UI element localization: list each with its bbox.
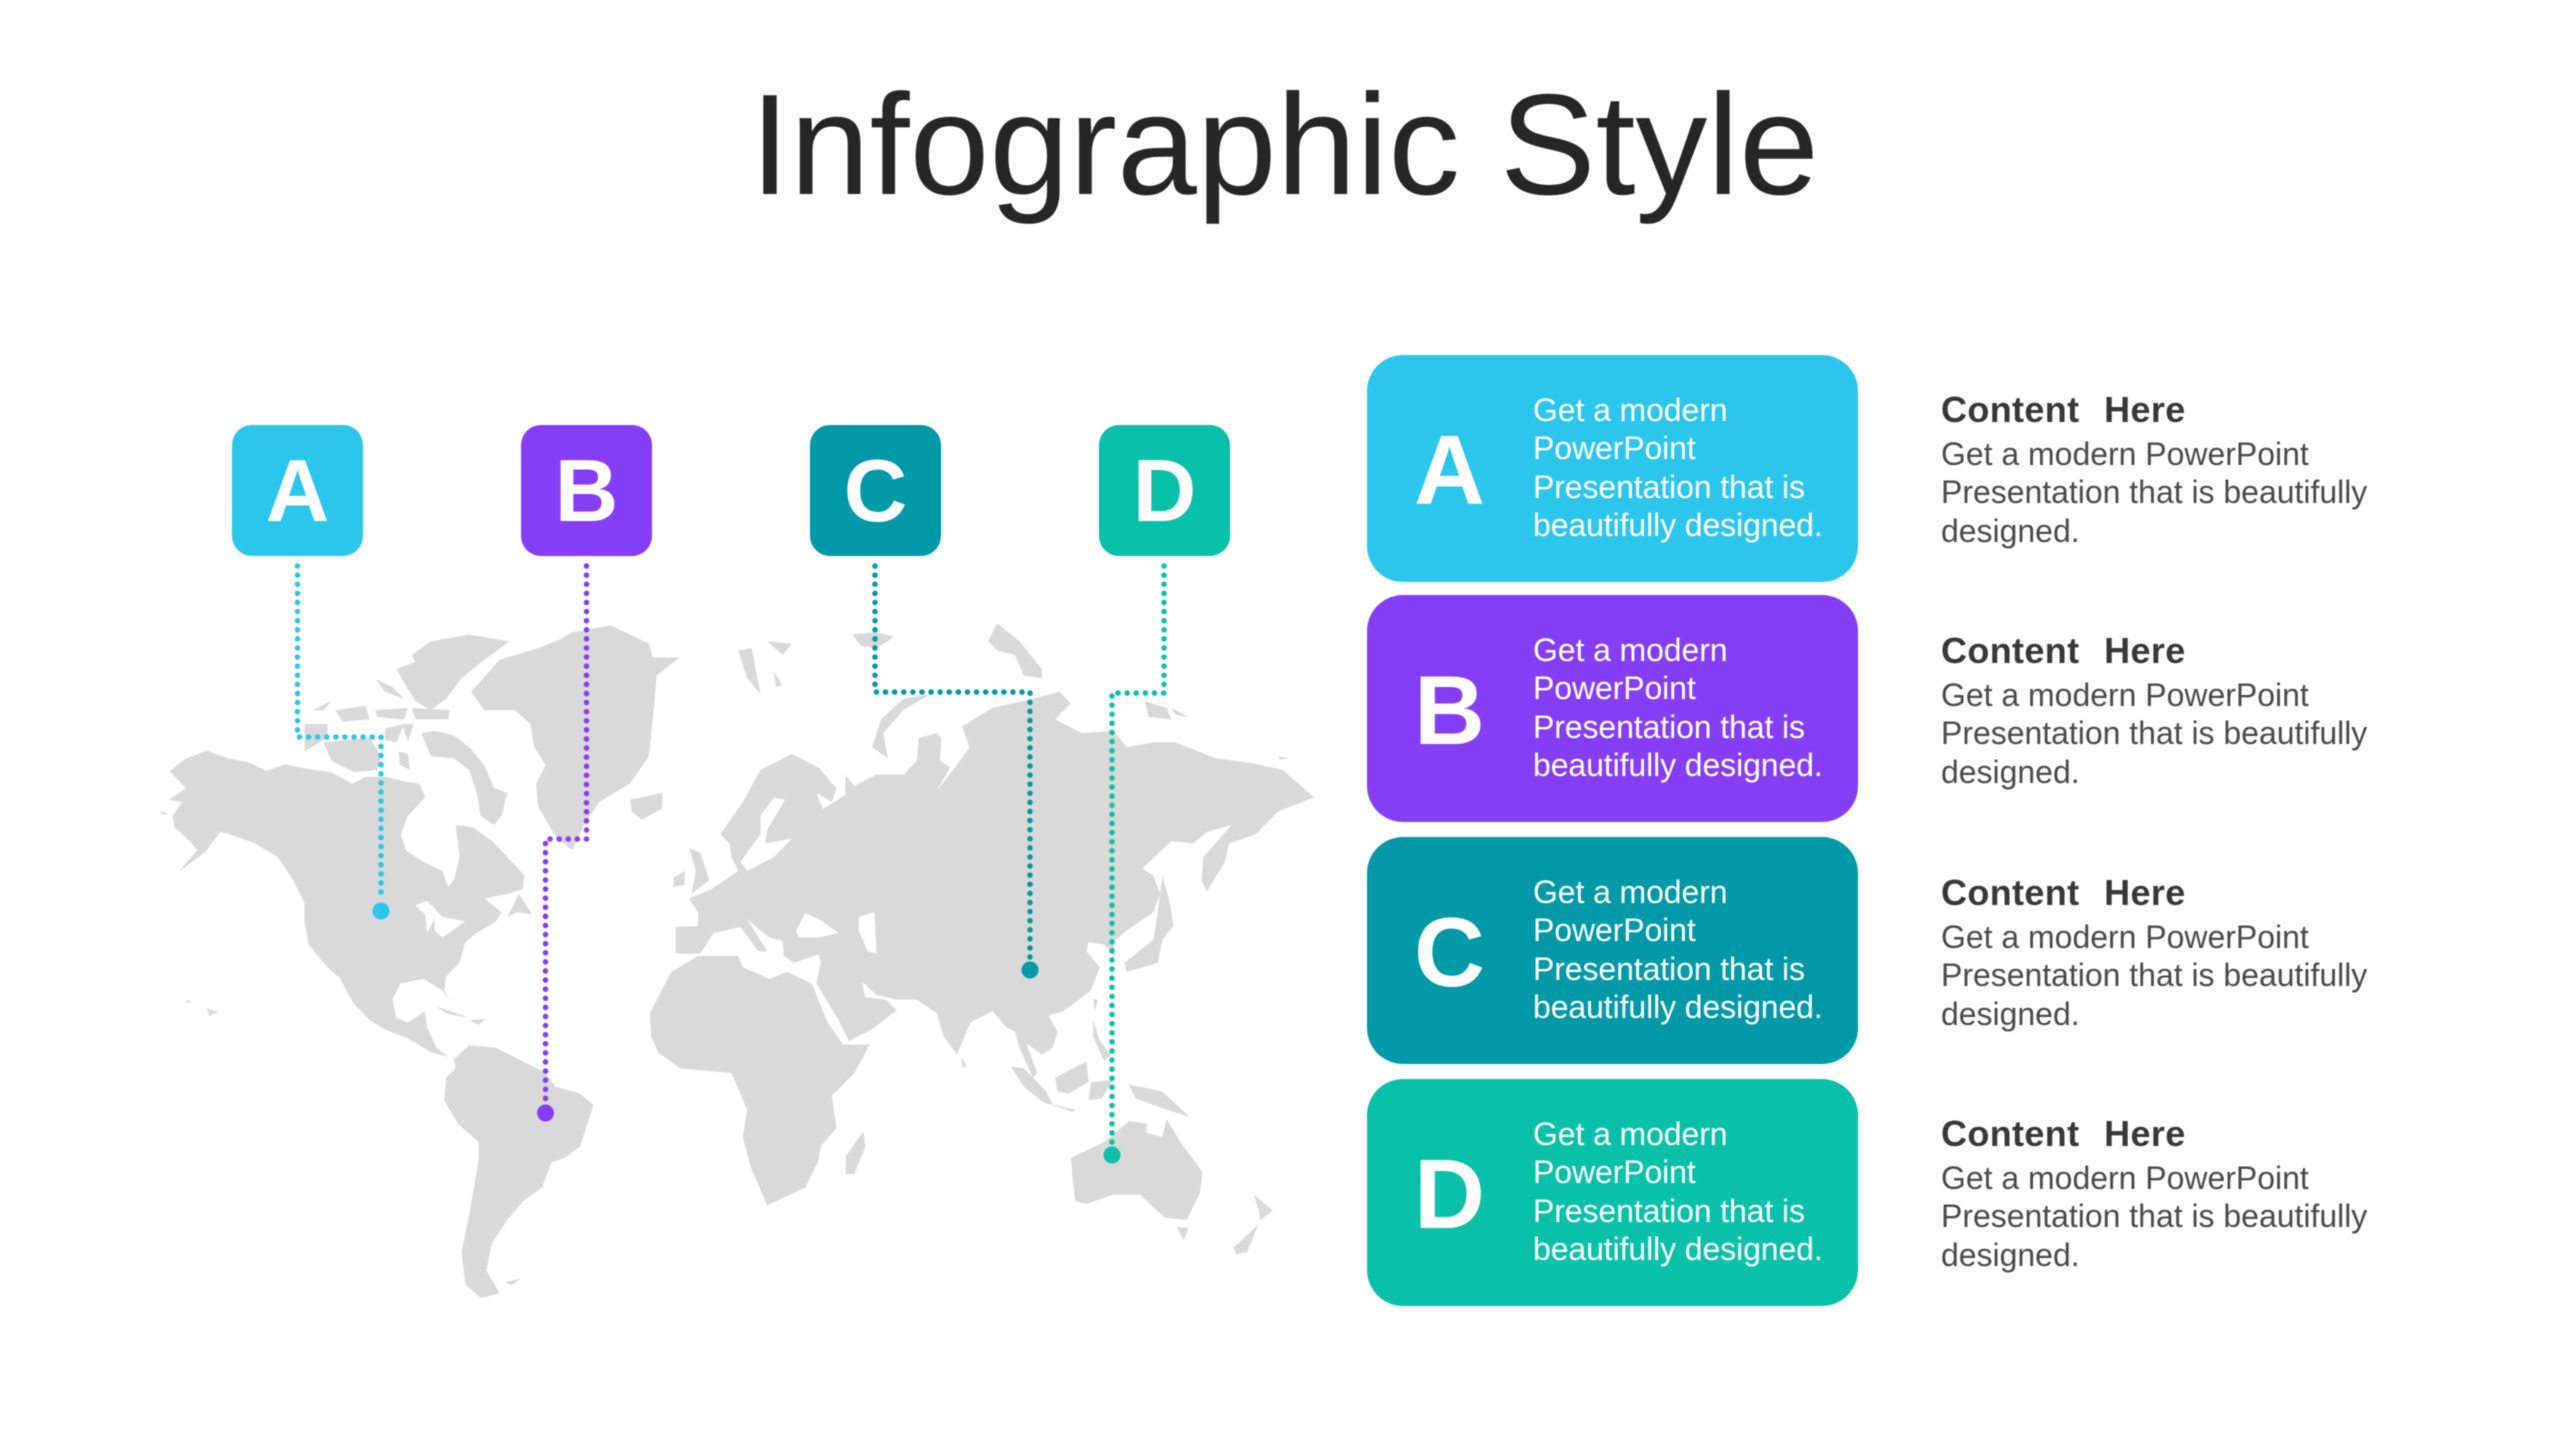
panel D: beautifully designed.	[1533, 1231, 1823, 1267]
badge D	[1099, 424, 1230, 556]
panel B: B	[1414, 655, 1485, 765]
text block A: Presentation that is beautifully	[1941, 474, 2367, 510]
panel C: C	[1414, 897, 1485, 1007]
panel C: beautifully designed.	[1533, 989, 1823, 1025]
panel C: Presentation that is	[1533, 951, 1805, 987]
panel D: Get a modern	[1533, 1116, 1727, 1152]
badge A	[232, 424, 363, 556]
text block B: Content Here	[1941, 630, 2186, 671]
panel D: D	[1414, 1139, 1485, 1249]
text block B: Get a modern PowerPoint	[1941, 677, 2309, 713]
text block D: Content Here	[1941, 1113, 2186, 1154]
text block A: designed.	[1941, 513, 2080, 549]
text block D: designed.	[1941, 1237, 2080, 1273]
panel C: Get a modern	[1533, 874, 1727, 910]
text block A: Get a modern PowerPoint	[1941, 436, 2309, 472]
text block C: Content Here	[1941, 872, 2186, 913]
map: Eurasia, Africa, Oceania	[640, 623, 1314, 1254]
panel B: Get a modern	[1533, 632, 1727, 668]
text block D: Get a modern PowerPoint	[1941, 1160, 2309, 1196]
text block C: Get a modern PowerPoint	[1941, 919, 2309, 955]
connector A	[298, 566, 390, 920]
connector C	[875, 566, 1038, 978]
badge C: C	[844, 440, 907, 540]
text block B: Presentation that is beautifully	[1941, 715, 2367, 751]
text block A	[1941, 389, 2368, 550]
panel D	[1367, 1079, 1858, 1306]
badge D: D	[1133, 440, 1196, 540]
panel C	[1367, 837, 1858, 1064]
panel B	[1367, 595, 1858, 822]
text block B: designed.	[1941, 754, 2080, 790]
panel A	[1367, 355, 1858, 582]
panel D: Presentation that is	[1533, 1193, 1805, 1229]
panel A: A	[1414, 415, 1485, 525]
text block D: Presentation that is beautifully	[1941, 1198, 2367, 1234]
text block B	[1941, 630, 2368, 790]
text block C	[1941, 872, 2368, 1032]
badge B	[521, 424, 652, 556]
panel A: Get a modern	[1533, 392, 1727, 428]
text block A: Content Here	[1941, 389, 2186, 430]
panel A: PowerPoint	[1533, 430, 1696, 466]
panel D: PowerPoint	[1533, 1154, 1696, 1190]
badge C	[810, 424, 941, 556]
panel B: PowerPoint	[1533, 670, 1696, 706]
text block C: designed.	[1941, 996, 2080, 1032]
map: Americas, Greenland, Iceland	[159, 625, 680, 1298]
panel C: PowerPoint	[1533, 912, 1696, 948]
badge B: B	[555, 440, 618, 540]
connector B	[537, 566, 586, 1122]
panel A: Presentation that is	[1533, 469, 1805, 505]
text block C: Presentation that is beautifully	[1941, 957, 2367, 993]
connector D	[1104, 566, 1164, 1164]
title: Infographic Style	[750, 65, 1819, 225]
panel B: beautifully designed.	[1533, 747, 1823, 783]
panel B: Presentation that is	[1533, 709, 1805, 745]
text block D	[1941, 1113, 2368, 1274]
panel A: beautifully designed.	[1533, 507, 1823, 543]
badge A: A	[266, 440, 329, 540]
